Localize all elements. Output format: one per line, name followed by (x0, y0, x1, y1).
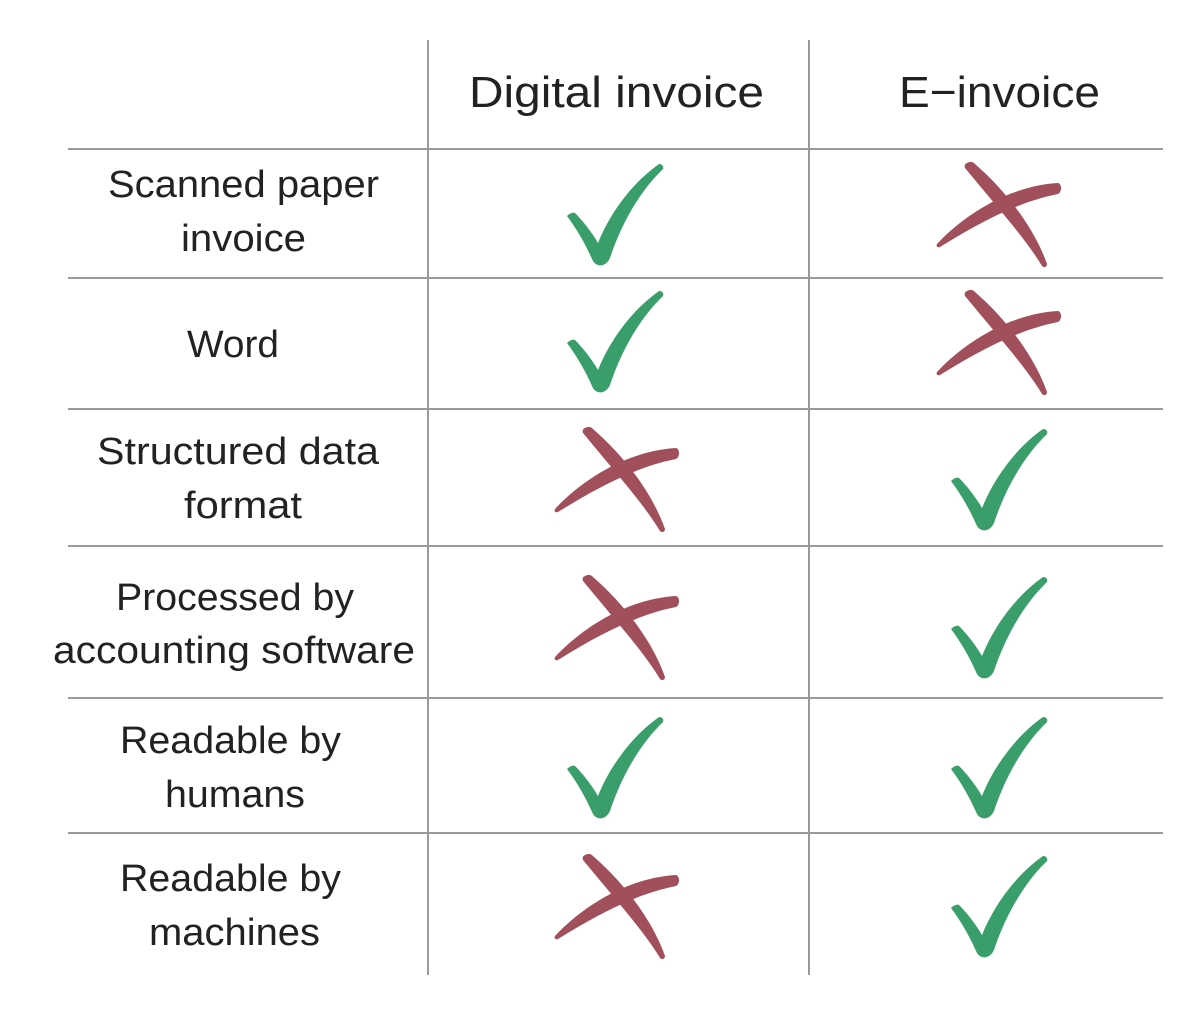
icon: check row2 digital (567, 291, 663, 392)
row label: Readable by machines: Readable by (120, 858, 341, 900)
row label: Readable by humans: humans (165, 774, 305, 816)
icon: cross row6 digital (555, 854, 679, 959)
row label: Readable by humans: Readable by (120, 720, 341, 762)
icon: check row6 e-invoice (951, 856, 1047, 957)
row label: Processed by accounting software: accounting software (53, 630, 415, 672)
header: E-invoice: E−invoice (899, 68, 1100, 117)
icon: cross row3 digital (555, 427, 679, 532)
row label: Readable by humans (120, 720, 341, 816)
icon: check row5 e-invoice (951, 717, 1047, 818)
icon: check row5 digital (567, 717, 663, 818)
row label: Readable by machines (120, 858, 341, 954)
row label: Structured data format: format (184, 485, 302, 527)
row label: Readable by machines: machines (149, 912, 320, 954)
row label: Structured data format (97, 431, 380, 527)
icon: cross row1 e-invoice (937, 162, 1061, 267)
row label: Scanned paper invoice (108, 164, 379, 260)
row label: Processed by accounting software (53, 577, 415, 672)
row label: Word: Word (187, 324, 279, 366)
icon: check row3 e-invoice (951, 429, 1047, 530)
row label: Scanned paper invoice: Scanned paper (108, 164, 379, 206)
row label: Structured data format: Structured data (97, 431, 380, 473)
icon: check row4 e-invoice (951, 577, 1047, 678)
icon: check row1 digital (567, 164, 663, 265)
icon: cross row2 e-invoice (937, 290, 1061, 395)
row label: Processed by accounting software: Processed by (116, 577, 354, 619)
row label: Scanned paper invoice: invoice (181, 218, 306, 260)
icon: cross row4 digital (555, 575, 679, 680)
header: Digital invoice: Digital invoice (469, 68, 764, 117)
